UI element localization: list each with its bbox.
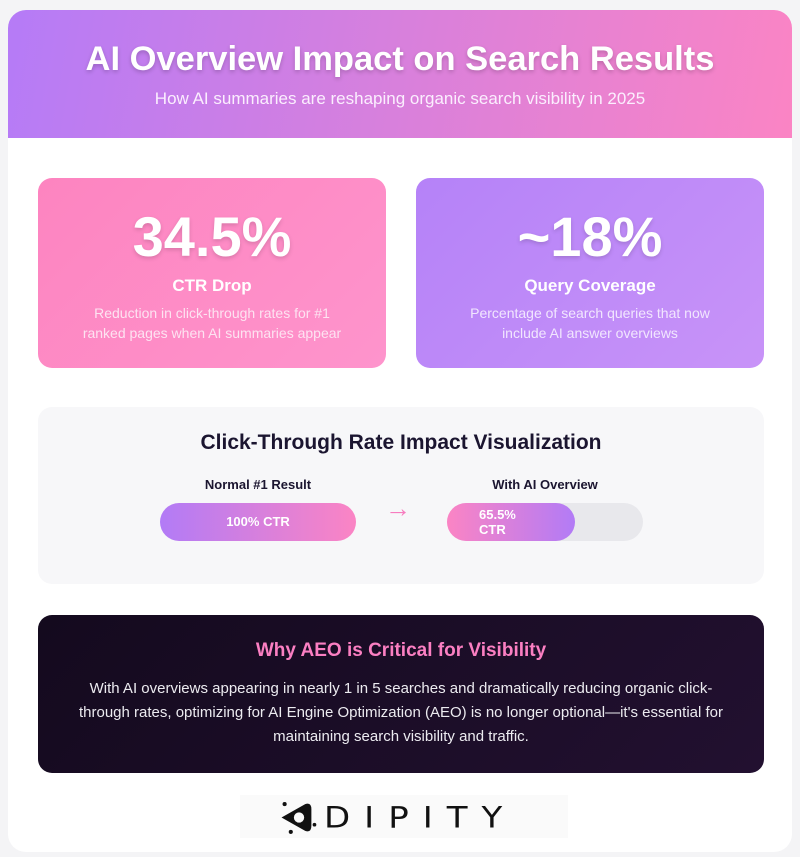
header	[8, 10, 792, 138]
subtitle: How AI summaries are reshaping organic search visibility in 2025	[155, 89, 645, 108]
bar: with AI overview: CTR	[479, 522, 506, 537]
stat card: query coverage	[416, 178, 764, 368]
panel: why AEO	[38, 615, 764, 773]
title: AI Overview Impact on Search Results	[86, 40, 714, 78]
bar: normal	[160, 477, 356, 541]
bar: normal: 100% CTR	[226, 514, 290, 529]
stat number: 34.5%	[133, 205, 291, 268]
body text: With AI overviews appearing in nearly 1 in 5 searches and dramatically reducing organic click-through rates, optimizing for AI Engine Optimization (AEO) is no longer optional—it's essential for maintaining search visibility and traffic.	[79, 680, 723, 745]
stat label: Query Coverage	[524, 276, 656, 295]
stat number: ~18%	[518, 205, 662, 268]
stat label: CTR Drop	[172, 276, 252, 295]
bar: with AI overview: With AI Overview	[492, 477, 598, 492]
bar: with AI overview: 65.5%	[479, 507, 516, 522]
wordmark: DIPITY	[324, 801, 516, 835]
icon: logo mark	[282, 802, 316, 834]
bar: normal: Normal #1 Result	[205, 477, 311, 492]
heading: Why AEO is Critical for Visibility	[256, 640, 546, 661]
stat card: CTR drop	[38, 178, 386, 368]
logo	[240, 795, 568, 838]
stat description: Percentage of search queries that now include AI answer overviews	[470, 305, 710, 341]
stat description: Reduction in click-through rates for #1 ranked pages when AI summaries appear	[83, 305, 341, 341]
bar: with AI overview	[447, 477, 643, 541]
arrow: →	[385, 493, 411, 523]
panel: CTR visualization	[38, 407, 764, 584]
chart heading: Click-Through Rate Impact Visualization	[200, 431, 602, 454]
